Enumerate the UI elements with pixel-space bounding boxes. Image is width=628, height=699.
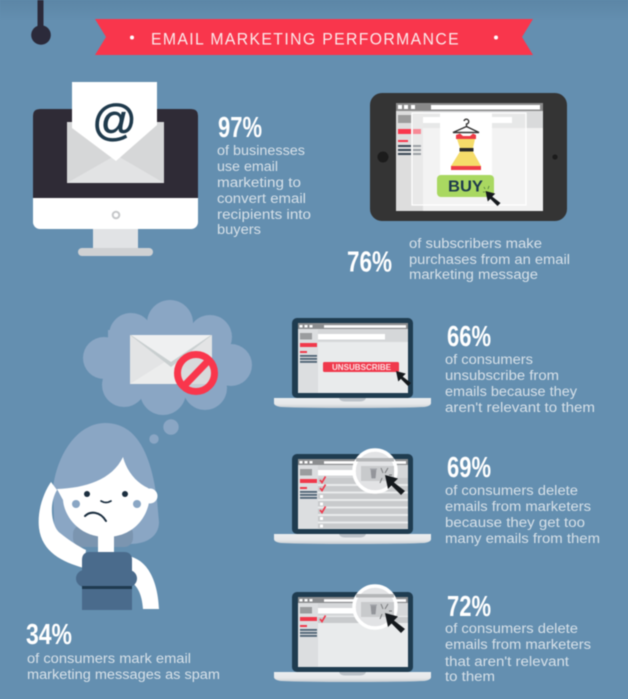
email list rows bbox=[318, 476, 408, 528]
stat: 34% spam: of consumers mark email bbox=[27, 651, 191, 666]
stat: 76% of subscribers: marketing message bbox=[409, 267, 538, 282]
stat: 66% unsubscribe: aren't relevant to them bbox=[445, 400, 595, 415]
stat: 72% delete: 72% bbox=[447, 591, 491, 623]
stat: 97% of businesses: buyers bbox=[217, 222, 261, 237]
stat: 69% delete: of consumers delete bbox=[445, 483, 578, 498]
stat: 66% unsubscribe: 66% bbox=[447, 321, 491, 353]
stat: 66% unsubscribe: of consumers bbox=[445, 352, 533, 367]
stat: 97% of businesses: of businesses bbox=[217, 143, 305, 158]
stat: 72% delete bbox=[445, 591, 591, 684]
stat: 66% unsubscribe: emails because they bbox=[445, 384, 577, 399]
icon: dress bbox=[451, 134, 481, 170]
icon: cursor bbox=[385, 613, 405, 633]
icon: cursor bbox=[396, 371, 411, 386]
icon: cursor bbox=[385, 475, 405, 495]
stat: 66% unsubscribe bbox=[445, 321, 595, 415]
stat: 97% of businesses bbox=[217, 112, 311, 237]
icon: hanger bbox=[453, 119, 479, 132]
icon: hanging pin bbox=[31, 0, 51, 45]
stat: 97% of businesses: convert email bbox=[217, 191, 306, 206]
stat: 69% delete: because they get too bbox=[445, 515, 585, 530]
stat: 76% of subscribers: of subscribers make bbox=[409, 236, 542, 251]
icon: envelope bbox=[130, 335, 212, 384]
cloud shape bbox=[83, 300, 252, 415]
neck bbox=[98, 530, 114, 561]
stat: 34% spam: 34% bbox=[26, 619, 72, 651]
stat: 72% delete: of consumers delete bbox=[445, 621, 578, 636]
stat: 66% unsubscribe: unsubscribe from bbox=[445, 368, 559, 383]
stat: 69% delete: many emails from them bbox=[445, 531, 600, 546]
stat: 69% delete bbox=[445, 452, 600, 546]
stat: 97% of businesses: 97% bbox=[218, 112, 262, 144]
icon: tablet with dress and buy button bbox=[370, 93, 567, 221]
stat: 69% delete: 69% bbox=[447, 452, 491, 484]
stat: 76% of subscribers: purchases from an email bbox=[409, 252, 570, 267]
stat: 76% of subscribers bbox=[347, 236, 570, 282]
laptop: delete too many emails bbox=[274, 450, 431, 544]
buy button bbox=[437, 175, 494, 197]
unsubscribe button: UNSUBSCRIBE bbox=[332, 362, 391, 372]
stat: 72% delete: to them bbox=[445, 669, 495, 684]
laptop: delete irrelevant emails bbox=[274, 586, 431, 682]
stat: 76% of subscribers: 76% bbox=[347, 246, 392, 278]
top bbox=[76, 552, 137, 610]
stat: 97% of businesses: recipients into bbox=[217, 207, 311, 222]
illustration: worried woman bbox=[39, 423, 159, 610]
icon: desktop monitor with envelope bbox=[33, 82, 198, 256]
icon: desktop monitor with envelope: @ bbox=[92, 96, 137, 145]
icon: cursor bbox=[486, 191, 500, 206]
magnifier bbox=[354, 450, 396, 492]
title banner bbox=[95, 19, 533, 55]
stat: 34% spam bbox=[26, 619, 220, 682]
magnifier bbox=[354, 586, 396, 628]
stat: 97% of businesses: use email bbox=[217, 159, 278, 174]
stat: 72% delete: that aren't relevant bbox=[445, 654, 569, 669]
title banner: EMAIL MARKETING PERFORMANCE bbox=[151, 30, 460, 48]
stat: 72% delete: emails from marketers bbox=[445, 637, 591, 652]
stat: 97% of businesses: marketing to bbox=[217, 175, 301, 190]
stat: 34% spam: marketing messages as spam bbox=[27, 667, 220, 682]
email row bbox=[318, 616, 408, 623]
laptop: unsubscribe bbox=[274, 318, 431, 408]
stat: 69% delete: emails from marketers bbox=[445, 499, 591, 514]
thought cloud with blocked email bbox=[83, 300, 252, 444]
face bbox=[57, 457, 150, 537]
raised arm bbox=[39, 482, 86, 568]
buy button: BUY bbox=[448, 178, 484, 196]
icon: prohibited sign bbox=[178, 354, 214, 392]
other arm bbox=[128, 556, 159, 609]
hair bbox=[53, 423, 159, 544]
